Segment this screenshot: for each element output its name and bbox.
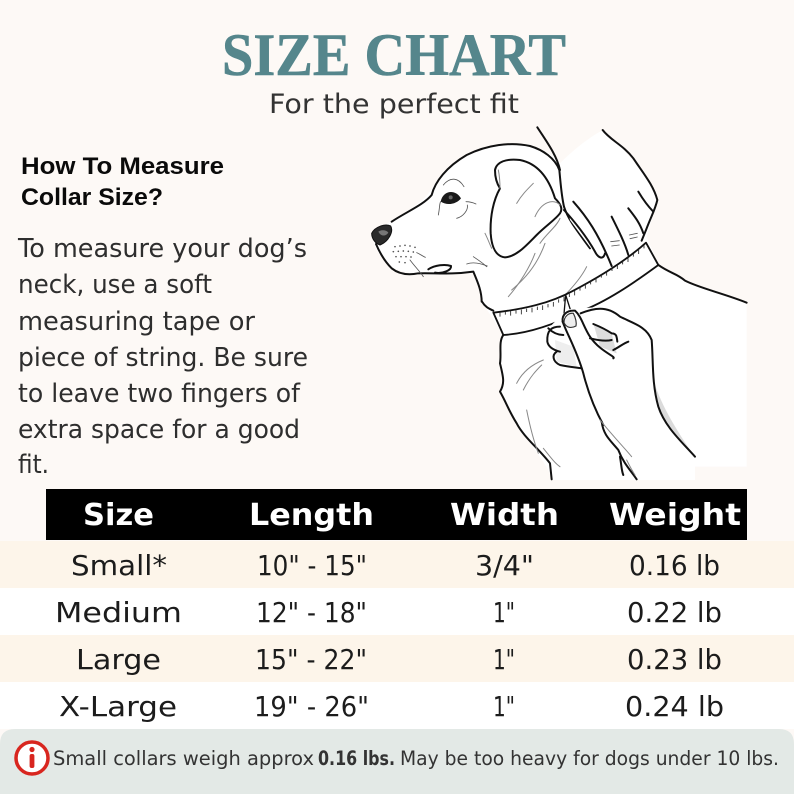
illustration: dog being measured [372,127,747,480]
table header: Size [83,498,154,533]
table row: medium: 12" - 18" [256,597,367,629]
table row: x-large: 0.24 lb [625,691,724,723]
note text: 0.16 lbs. [318,747,395,770]
title: SIZE CHART [222,22,566,88]
table row: large: 0.23 lb [627,644,722,676]
text block: measuring instructions [17,234,308,480]
text block: measuring instructions: measuring tape or [18,307,255,337]
table row: medium: 1" [493,597,515,629]
dog body fill [372,130,747,480]
table header [46,489,747,540]
table row: small: 0.16 lb [629,550,720,582]
heading: how to measure: Collar Size? [21,184,163,211]
upper hand [560,130,657,263]
table row: x-large: 1" [493,691,515,723]
table row: large [76,644,722,676]
thumbnail [564,313,576,327]
muzzle dots [392,244,416,263]
note text [53,747,779,770]
lower hand [548,307,695,480]
knuckle creases [611,233,637,246]
back line [658,265,747,303]
nose [372,225,392,245]
table row: small [71,550,720,582]
table row: small: 3/4" [475,550,534,582]
table row: medium: Medium [55,597,182,629]
table row: x-large: 19" - 26" [254,691,369,723]
table row: large: Large [76,644,161,676]
table header: Length [249,498,374,533]
text block: measuring instructions: piece of string. Be sure [18,343,308,373]
heading: how to measure: How To Measure [21,153,224,180]
tape ticks [500,245,644,317]
table row: small: 10" - 15" [257,550,367,582]
table row: small: Small* [71,550,167,582]
table rows background [0,541,794,729]
table header: Width [450,498,559,533]
table row: x-large [59,691,724,723]
chest and leg outline [500,335,637,479]
table row: x-large: X-Large [59,691,177,723]
eye [441,192,461,204]
head and neck outline [376,127,590,311]
ear shading [498,170,560,217]
text block: measuring instructions: to leave two fingers of [18,379,301,409]
shaded fingers [593,323,617,353]
hanging tape strap [564,295,571,314]
text block: measuring instructions: extra space for a good [18,415,300,445]
table row: large: 1" [493,644,515,676]
note text: Small collars weigh approx [53,747,314,770]
subtitle: For the perfect fit [269,89,519,120]
icon: info warning [16,742,48,774]
text block: measuring instructions: neck, use a soft [18,270,212,300]
text block: measuring instructions: To measure your dog’s [17,234,307,264]
note text: May be too heavy for dogs under 10 lbs. [400,747,779,770]
chest fur [517,360,635,475]
note panel [0,729,794,794]
table row: medium: 0.22 lb [627,597,722,629]
neck fur [485,218,587,297]
table header: Weight [609,498,741,533]
measuring tape [493,243,658,335]
heading: how to measure [21,153,224,211]
face detail lines [410,179,487,277]
ear [491,160,561,257]
table row: large: 15" - 22" [255,644,367,676]
table row: medium [55,597,722,629]
text block: measuring instructions: fit. [18,450,49,480]
